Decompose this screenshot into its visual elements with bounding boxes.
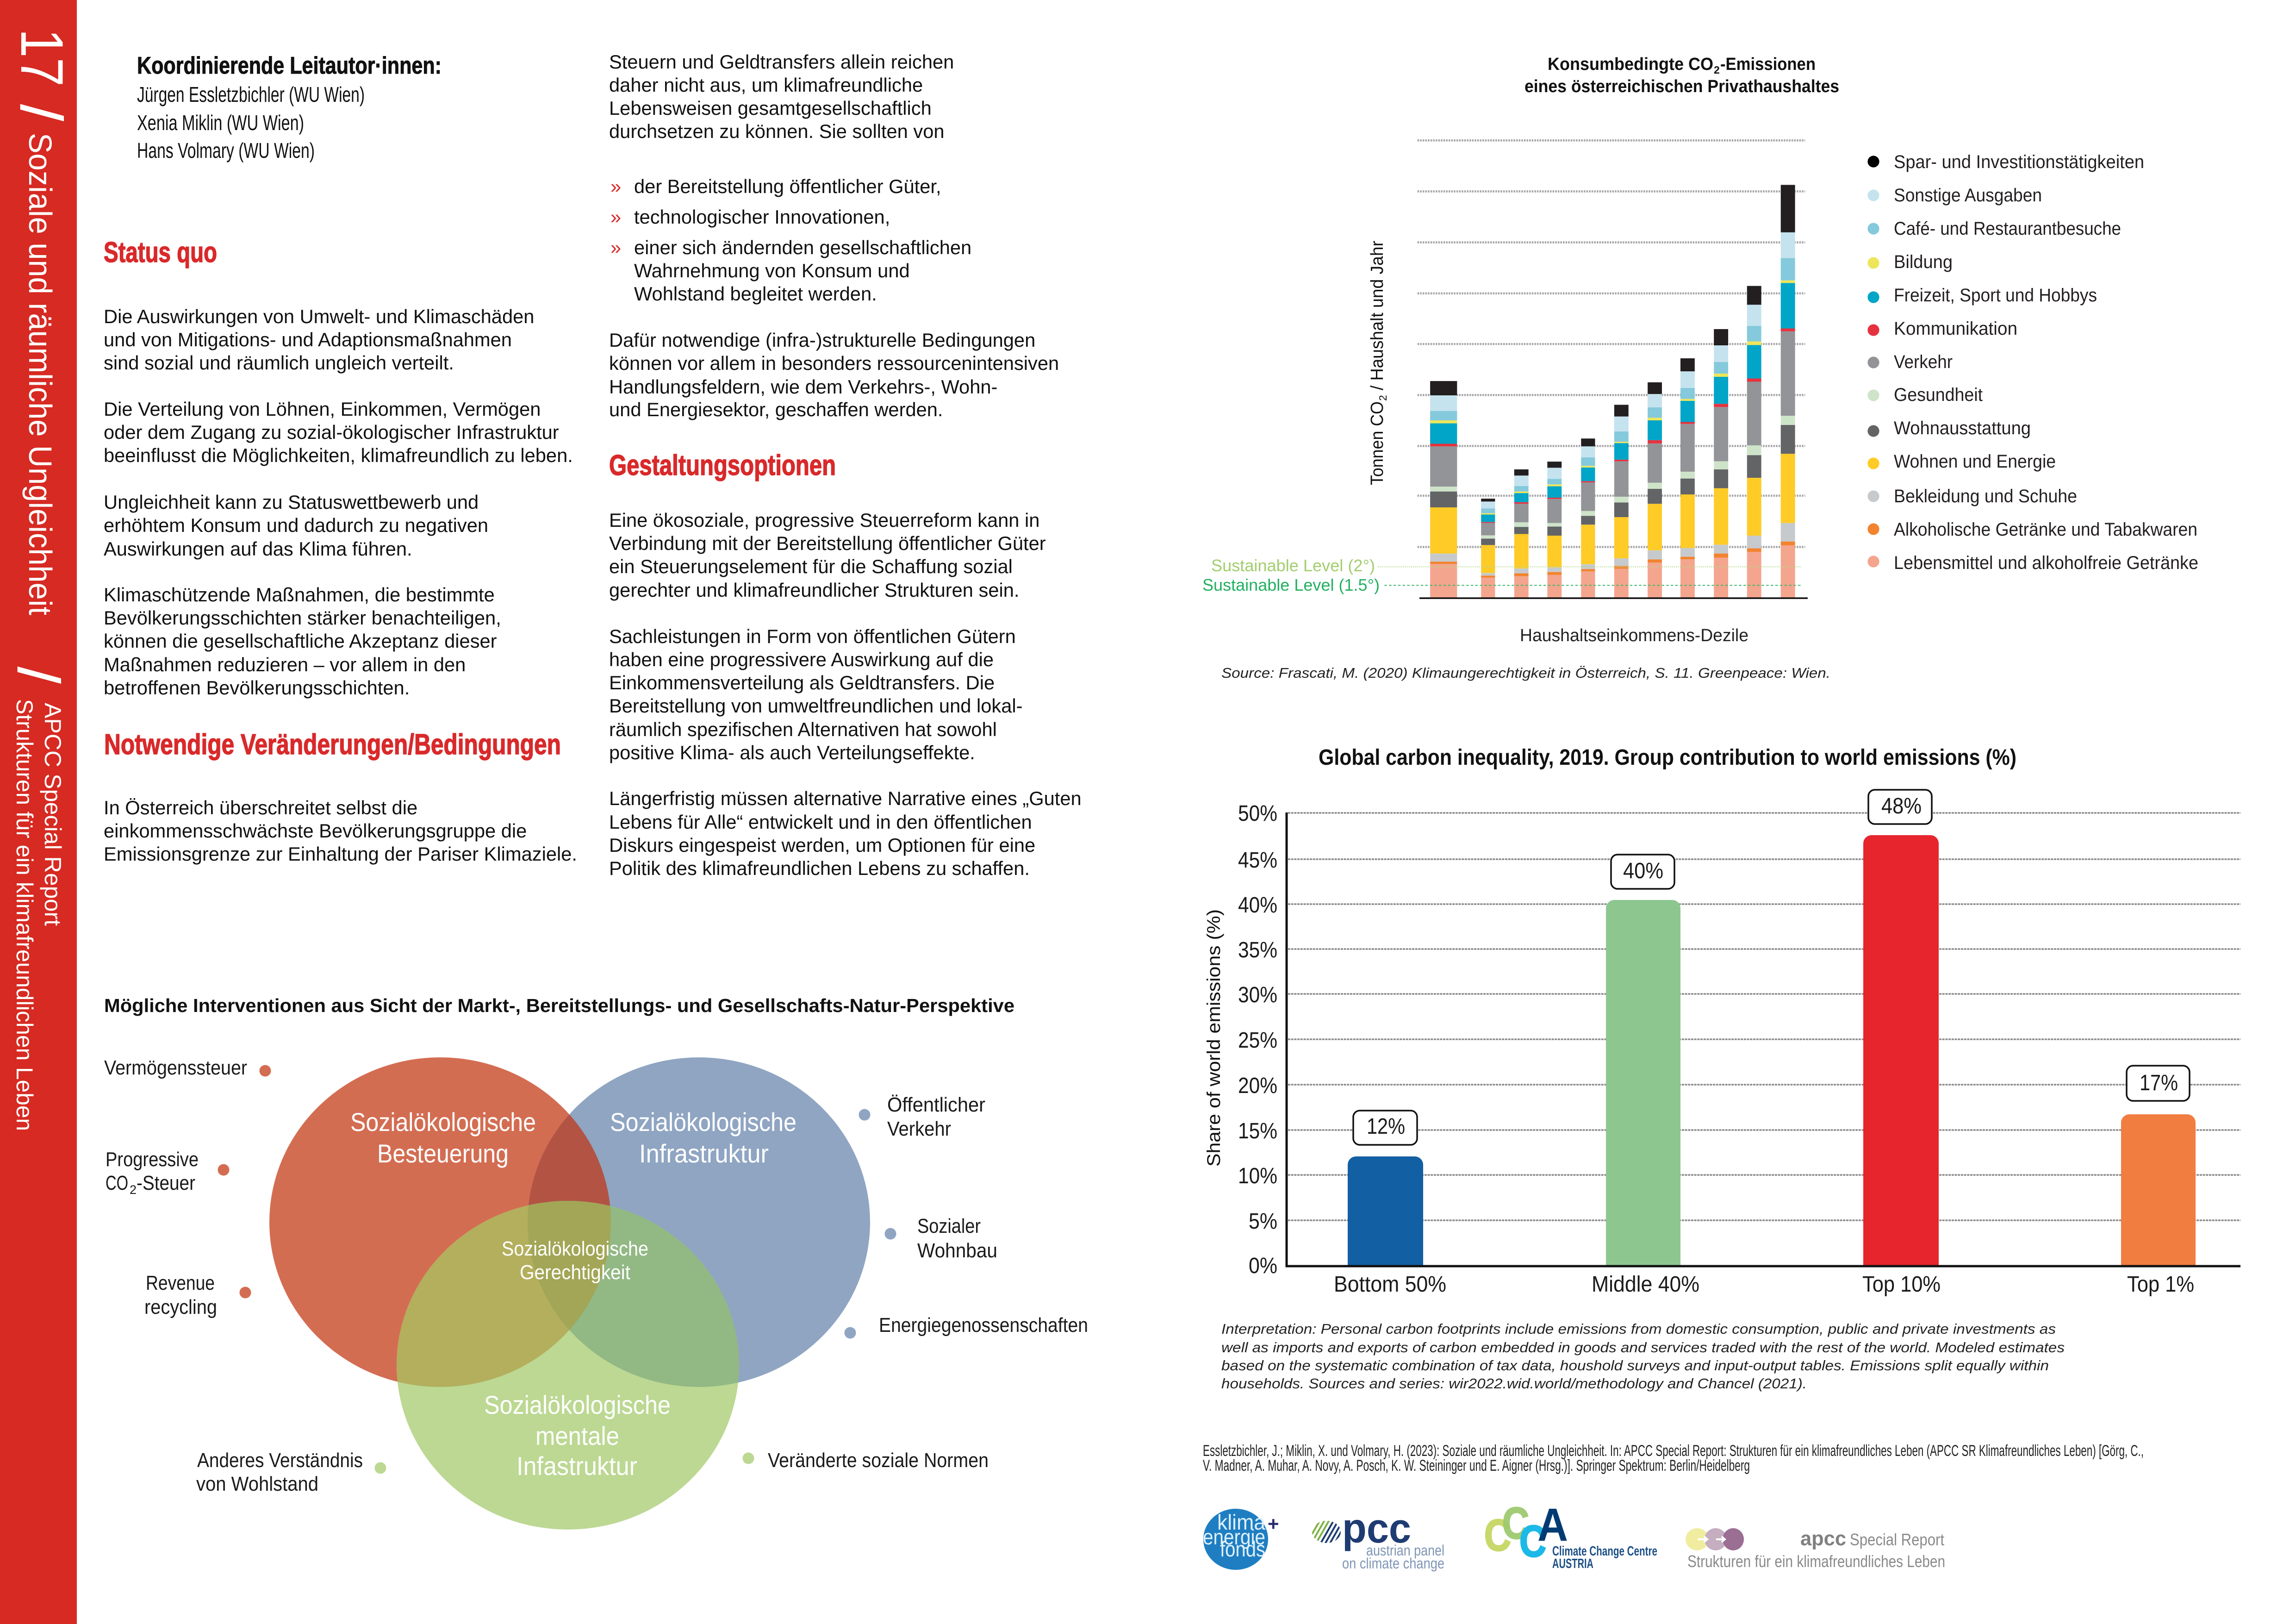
stacked chart title: 2 [1714,64,1720,76]
value label 40% [1611,855,1674,889]
text: options paragraph 3: Lebens für Alle“ entwickelt und in den öffentlichen [609,811,1032,833]
bar: middle 40% [1606,900,1680,1265]
venn callout: Revenue recycling [144,1272,251,1318]
x category labels: Top 10% [1862,1272,1941,1297]
stacked chart title [1524,55,1839,96]
text: options paragraph 2: positive Klima- als auch Verteilungseffekte. [609,742,975,763]
report name: APCC Special Report [40,703,66,926]
legend labels: Kommunikation [1894,319,2017,339]
bar: decile 11 (top) [1778,185,1798,598]
report subtitle: Strukturen für ein klimafreundlichen Leben [12,699,37,1131]
text: infrastructural conditions: Dafür notwendige (infra-)strukturelle Bedingungen [609,329,1035,351]
text: column 2 intro: daher nicht aus, um klimafreundliche [609,74,923,96]
bar: top 10% [1863,835,1939,1265]
label: mentale Infrastruktur: mentale [535,1421,619,1450]
text: options paragraph 1: Verbindung mit der Bereitstellung öffentlicher Güter [609,532,1046,554]
legend labels: Freizeit, Sport und Hobbys [1894,285,2097,306]
citation: V. Madner, A. Muhar, A. Novy, A. Posch, K. W. Steininger und E. Aigner (Hrsg.)]. Springer Spektrum: Berlin/Heidelberg [1203,1457,1750,1474]
y axis title: Share of world emissions (%) [1204,909,1224,1167]
heading: Status quo: Status quo [104,237,217,269]
bar: decile 10 [1744,286,1764,598]
label: Gerechtigkeit: Gerechtigkeit [520,1261,630,1284]
author 3: Hans Volmary (WU Wien) [137,138,315,162]
label: mentale Infrastruktur: Sozialökologische [484,1390,671,1419]
legend labels: Alkoholische Getränke und Tabakwaren [1894,519,2197,540]
bar: decile 3 [1511,469,1531,598]
stacked chart y-axis label: Tonnen CO [1368,401,1387,485]
interpretation note [1221,1321,2065,1392]
stacked bar chart [1378,140,1808,598]
bar chart: global carbon inequality [1204,790,2240,1297]
text: options paragraph 1: gerechter und klimafreundlicher Strukturen sein. [609,579,1019,601]
value label 17% [2127,1066,2190,1101]
circle: Besteuerung [269,1057,611,1387]
text: status quo paragraph 2: oder dem Zugang zu sozial-ökologischer Infrastruktur [104,421,559,443]
venn callout: Anderes Verständnis von Wohlstand: von Wohlstand [196,1473,318,1495]
sidebar: chapter title [0,0,77,1624]
logo: APCC Special Report: apcc [1800,1527,1846,1550]
legend labels: Spar- und Investitionstätigkeiten [1894,152,2144,172]
value label 12%: 12% [1367,1114,1405,1139]
text: status quo paragraph 1: Die Auswirkungen von Umwelt- und Klimaschäden [104,306,534,327]
venn callout: Öffentlicher Verkehr [859,1093,985,1140]
bar: decile 1 (mean) [1425,381,1463,598]
source note: Source: Frascati, M. (2020) Klimaungerechtigkeit in Österreich, S. 11. Greenpeace: Wien. [1221,665,1830,681]
label: Besteuerung: Sozialökologische [350,1107,536,1137]
stacked chart title: -Emissionen [1720,55,1816,74]
stacked chart y-axis label: 2 [1377,395,1389,401]
logo: APCC [1312,1520,1444,1571]
logo: CCCA: AUSTRIA [1552,1556,1593,1571]
author 1: Jürgen Essletzbichler (WU Wien) [137,82,365,106]
label: Besteuerung: Besteuerung [377,1139,509,1168]
logo: CCCA: C [1519,1517,1546,1566]
logo: Klima- und Energiefonds: fonds [1220,1537,1265,1561]
venn callout: Anderes Verständnis von Wohlstand [196,1449,386,1495]
venn callout: Revenue recycling: recycling [144,1296,217,1318]
y tick labels: 5% [1249,1209,1277,1234]
legend labels: Gesundheit [1894,385,1983,405]
y tick labels: 25% [1238,1028,1277,1053]
value label 17%: 17% [2140,1071,2178,1095]
legend labels [1894,152,2198,573]
venn callout: Revenue recycling: Revenue [146,1272,215,1294]
logo: APCC: austrian panel [1366,1542,1444,1559]
logo: APCC Special Report: Special Report [1850,1530,1944,1549]
legend dots [1867,156,1879,568]
stacked chart title: eines österreichischen Privathaushaltes [1524,77,1839,96]
bullet marks: » [610,237,621,258]
circle: mentale Infrastruktur [397,1201,739,1530]
text: column 2 intro: Steuern und Geldtransfers allein reichen [609,51,954,73]
label: sustainable level 1.5: Sustainable Level (1.5°) [1202,575,1380,594]
logo: Klima- und Energiefonds [1203,1509,1279,1570]
text: infrastructural conditions: und Energiesektor, geschaffen werden. [609,399,943,420]
text: status quo paragraph 4: betroffenen Bevölkerungsschichten. [104,677,410,699]
bar chart title: Global carbon inequality, 2019. Group contribution to world emissions (%) [1319,745,2016,770]
text: column 2 intro: durchsetzen zu können. Sie sollten von [609,120,945,142]
label: Infrastruktur: Sozialökologische [610,1107,796,1137]
icon: hatched a [1312,1521,1341,1543]
venn callout: Sozialer Wohnbau: Wohnbau [917,1239,997,1262]
legend labels: Verkehr [1894,352,1953,372]
venn callout: Energiegenossenschaften: Energiegenossenschaften [879,1314,1088,1337]
label: mentale Infrastruktur: Infastruktur [516,1451,637,1480]
text: status quo paragraph 4: können die gesellschaftliche Akzeptanz dieser [104,630,497,652]
text: options paragraph 2: räumlich spezifischen Alternativen hat sowohl [609,718,997,740]
y tick labels: 15% [1238,1119,1277,1143]
logo: CCCA: C [1502,1499,1529,1548]
y tick labels: 10% [1238,1164,1277,1188]
text: status quo paragraph 4: Bevölkerungsschichten stärker benachteiligen, [104,607,501,629]
text: options paragraph 2: Bereitstellung von umweltfreundlichen und lokal- [609,695,1022,717]
text: status quo paragraph 3: erhöhtem Konsum und dadurch zu negativen [104,514,488,536]
y tick labels: 30% [1238,983,1277,1007]
stacked chart y-axis label: / Haushalt und Jahr [1368,241,1387,390]
venn diagram title: Mögliche Interventionen aus Sicht der Markt-, Bereitstellungs- und Gesellschafts-Natur-Perspektive [104,995,1014,1016]
y tick labels [1238,801,1277,1278]
x axis label: Haushaltseinkommens-Dezile [1520,626,1748,645]
chapter title: Soziale und räumliche Ungleichheit [22,133,58,615]
venn callout: Progressive CO2-Steuer [106,1148,230,1197]
venn callout: Anderes Verständnis von Wohlstand: Anderes Verständnis [197,1449,363,1472]
bar: decile 2 [1478,499,1498,598]
authors block [137,52,442,162]
text: options paragraph 1: ein Steuerungselement für die Schaffung sozial [609,556,1013,577]
logo: Klima- und Energiefonds: + [1268,1513,1279,1535]
authors heading: Koordinierende Leitautor·innen: [137,52,442,79]
bullet list [610,175,971,305]
label: Infrastruktur: Infrastruktur [639,1139,769,1168]
citation [1203,1442,2144,1474]
bar: decile 7 [1645,382,1665,598]
sustainable level 1.5 degrees line [1384,585,1801,586]
venn callout: Öffentlicher Verkehr: Öffentlicher [887,1093,985,1116]
interpretation note: households. Sources and series: wir2022.wid.world/methodology and Chancel (2021). [1221,1375,1807,1392]
text: options paragraph 1: Eine ökosoziale, progressive Steuerreform kann in [609,509,1039,531]
bullet marks: » [610,206,621,228]
value label 40%: 40% [1623,859,1663,883]
text: options paragraph 3: Diskurs eingespeist werden, um Optionen für eine [609,834,1035,856]
value label 48%: 48% [1881,794,1922,818]
logo: CCCA: C [1484,1511,1511,1560]
venn diagram [269,1057,870,1530]
y tick labels: 45% [1238,848,1277,873]
stacked chart y-axis label [1368,241,1389,485]
stacked chart title: Konsumbedingte CO [1548,55,1713,74]
x axis [1419,597,1808,600]
text: necessary changes: Emissionsgrenze zur Einhaltung der Pariser Klimaziele. [104,843,577,865]
text: status quo paragraph 1: und von Mitigations- und Adaptionsmaßnahmen [104,329,512,350]
text: options paragraph 2: Einkommensverteilung als Geldtransfers. Die [609,672,995,693]
text: necessary changes: einkommensschwächste Bevölkerungsgruppe die [104,820,527,842]
text: status quo paragraph 4: Maßnahmen reduzieren – vor allem in den [104,654,466,675]
legend labels: Lebensmittel und alkoholfreie Getränke [1894,553,2198,573]
text: options paragraph 3: Politik des klimafreundlichen Lebens zu schaffen. [609,857,1030,879]
venn callout: Progressive CO2-Steuer: CO [106,1172,128,1194]
text: status quo paragraph 1: sind sozial und räumlich ungleich verteilt. [104,352,454,374]
bar: decile 5 [1578,438,1598,598]
circle: Infrastruktur [528,1057,870,1387]
heading: Notwendige Veränderungen/Bedingungen: Notwendige Veränderungen/Bedingungen [104,729,561,761]
label: sustainable level 2: Sustainable Level (2°) [1211,556,1375,575]
text: status quo paragraph 3: Auswirkungen auf das Klima führen. [104,538,412,560]
bar: decile 8 [1677,358,1698,598]
heading: Gestaltungsoptionen: Gestaltungsoptionen [609,450,836,481]
text: status quo paragraph 4: Klimaschützende Maßnahmen, die bestimmte [104,584,495,606]
x category labels: Bottom 50% [1334,1272,1446,1297]
venn callout: Vermögenssteuer: Vermögenssteuer [104,1056,247,1079]
text: status quo paragraph 2: beeinflusst die Möglichkeiten, klimafreundlich zu leben. [104,444,573,466]
legend labels: Sonstige Ausgaben [1894,185,2042,206]
logo: APCC Special Report: Strukturen für ein klimafreundliches Leben [1687,1552,1945,1571]
venn callout: Progressive CO2-Steuer: Progressive [106,1148,199,1171]
value label 48% [1868,790,1932,824]
bar: decile 4 [1544,462,1565,598]
logo: APCC: pcc [1342,1505,1411,1552]
y tick labels: 50% [1238,801,1277,826]
logo: APCC Special Report [1686,1527,1945,1571]
bullet texts: technologischer Innovationen, [634,206,890,228]
text: options paragraph 2: Sachleistungen in Form von öffentlichen Gütern [609,625,1016,647]
logo: APCC: on climate change [1342,1555,1444,1572]
logo: CCCA: A [1537,1499,1568,1551]
legend [1867,152,2198,573]
logo: Klima- und Energiefonds: klima [1217,1510,1265,1534]
second slash: / [6,667,70,683]
text: infrastructural conditions: können vor allem in besonders ressourcenintensiven [609,352,1059,374]
venn callout: Progressive CO2-Steuer: 2 [130,1183,137,1197]
interpretation note: Interpretation: Personal carbon footprints include emissions from domestic consumption, public and private investments as [1221,1321,2056,1337]
bullet texts: Wahrnehmung von Konsum und [634,260,910,281]
chapter number 17: 17 [8,29,76,87]
bar: decile 6 [1611,405,1631,598]
x category labels: Middle 40% [1592,1272,1699,1297]
legend labels: Bekleidung und Schuhe [1894,486,2077,506]
label: Gerechtigkeit: Sozialökologische [502,1237,648,1260]
grid lines [1418,140,1805,547]
legend labels: Wohnen und Energie [1894,451,2056,472]
text: status quo paragraph 3: Ungleichheit kann zu Statuswettbewerb und [104,491,479,513]
bar: top 1% [2121,1114,2196,1265]
bar: decile 9 [1711,329,1731,598]
venn callout: Öffentlicher Verkehr: Verkehr [887,1118,951,1140]
legend labels: Café- und Restaurantbesuche [1894,219,2121,239]
y tick labels: 40% [1238,893,1277,918]
y tick labels: 0% [1249,1254,1277,1278]
interpretation note: based on the systematic combination of tax data, houshold surveys and input-output tables. Emissions split equally within [1221,1357,2049,1374]
slash: / [9,105,73,121]
bullet texts: Wohlstand begleitet werden. [634,283,877,305]
author 2: Xenia Miklin (WU Wien) [137,111,304,135]
legend labels: Bildung [1894,252,1953,272]
bullet texts: einer sich ändernden gesellschaftlichen [634,237,971,258]
text: status quo paragraph 2: Die Verteilung von Löhnen, Einkommen, Vermögen [104,398,541,420]
sustainable level 2 degrees line [1378,566,1801,568]
bullet texts: der Bereitstellung öffentlicher Güter, [634,175,941,197]
text: column 2 intro: Lebensweisen gesamtgesellschaftlich [609,97,932,119]
value label 12% [1353,1111,1417,1145]
x category labels: Top 1% [2127,1272,2194,1297]
x category labels [1334,1272,2194,1297]
venn callout: Sozialer Wohnbau [885,1215,997,1262]
icon: three circles [1686,1528,1744,1550]
legend labels: Wohnausstattung [1894,418,2031,438]
logo: CCCA: Climate Change Centre [1552,1544,1657,1559]
y tick labels: 20% [1238,1074,1277,1098]
text: options paragraph 3: Längerfristig müssen alternative Narrative eines „Guten [609,787,1082,809]
axes [1287,812,2240,1266]
y tick labels: 35% [1238,938,1277,962]
bar: bottom 50% [1348,1156,1423,1265]
text: necessary changes: In Österreich überschreitet selbst die [104,797,417,818]
logo: Klima- und Energiefonds: energie [1203,1525,1265,1549]
interpretation note: well as imports and exports of carbon embedded in goods and services traded with the rest of the world. Modeled estimates [1221,1339,2065,1355]
logo: CCCA [1484,1499,1657,1571]
text: options paragraph 2: haben eine progressivere Auswirkung auf die [609,649,994,670]
text: infrastructural conditions: Handlungsfeldern, wie dem Verkehrs-, Wohn- [609,376,997,398]
venn callout: Veränderte soziale Normen: Veränderte soziale Normen [768,1449,989,1472]
venn callout: Sozialer Wohnbau: Sozialer [917,1215,981,1237]
venn callout: Progressive CO2-Steuer: -Steuer [137,1172,195,1194]
bullet marks: » [610,175,621,197]
grid lines [1288,813,2240,1220]
